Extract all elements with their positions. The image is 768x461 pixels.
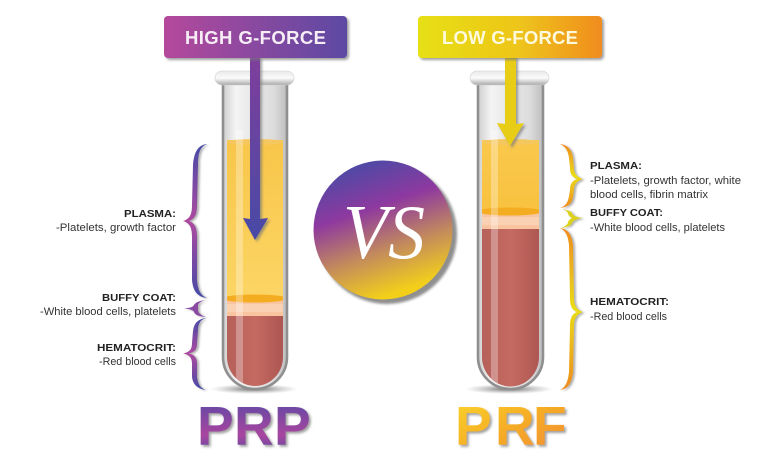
buffy top surface: [227, 294, 283, 302]
buffy coat layer: [482, 213, 539, 229]
left label: buffy coat: [40, 292, 176, 318]
left label: plasma: PLASMA:: [124, 208, 176, 220]
buffy top surface: [482, 208, 539, 216]
right test tube: [465, 71, 553, 394]
glass outline: [223, 84, 287, 389]
glass body: [478, 84, 543, 389]
badge shadow: [317, 164, 457, 304]
badge text: VS: [343, 189, 425, 275]
title: PRP: PRP: [197, 395, 311, 457]
plasma layer: [481, 140, 541, 212]
banner: high g-force: HIGH G-FORCE: [185, 27, 326, 48]
left brace: hematocrit: [183, 318, 206, 390]
right label: buffy coat: BUFFY COAT:: [590, 207, 663, 219]
buffy pale band: [226, 304, 284, 312]
right label: hematocrit: -Red blood cells: [590, 311, 667, 323]
left label: hematocrit: [97, 342, 176, 368]
arrow: low g-force: [497, 56, 524, 146]
tube shadow: [465, 384, 553, 394]
hematocrit layer: [481, 229, 541, 389]
plasma surface: [481, 139, 539, 145]
plasma surface: [226, 139, 284, 145]
glass body: [223, 84, 287, 389]
right label: hematocrit: HEMATOCRIT:: [590, 296, 669, 308]
glass outline: [478, 84, 543, 389]
right label: buffy coat: -White blood cells, platelets: [590, 222, 725, 234]
right label: plasma: blood cells, fibrin matrix: [590, 189, 709, 201]
right brace: buffy coat: [561, 209, 583, 228]
banner: low g-force: [418, 16, 602, 58]
right label: buffy coat: [590, 207, 725, 234]
left label: plasma: [56, 208, 176, 234]
right brace: hematocrit: [560, 228, 583, 390]
tube shadow: [210, 384, 298, 394]
left brace: plasma: [183, 144, 207, 298]
banner: high g-force: [164, 16, 347, 58]
vs badge: [314, 160, 457, 304]
left label: plasma: -Platelets, growth factor: [56, 222, 176, 234]
banner: low g-force: LOW G-FORCE: [442, 27, 578, 48]
right label: hematocrit: [590, 296, 669, 323]
liquid layers: [227, 139, 283, 386]
right label: plasma: [590, 160, 741, 201]
hematocrit layer: [226, 316, 284, 388]
liquid layers: [482, 139, 539, 386]
left label: buffy coat: -White blood cells, platelets: [40, 306, 176, 318]
plasma layer: [226, 140, 284, 300]
buffy coat layer: [227, 300, 283, 316]
left label: buffy coat: BUFFY COAT:: [102, 292, 176, 304]
left brace: buffy coat: [184, 300, 206, 317]
left label: hematocrit: -Red blood cells: [99, 356, 176, 368]
buffy pale band: [481, 217, 541, 225]
glass highlight: [236, 139, 243, 383]
right label: plasma: -Platelets, growth factor, white: [590, 175, 741, 187]
tube lip: [470, 71, 549, 85]
title: PRF: PRF: [455, 395, 567, 457]
arrow: high g-force: [243, 56, 268, 240]
glass highlight: [491, 139, 498, 384]
right brace: plasma: [560, 144, 583, 208]
tube lip: [215, 71, 294, 85]
left label: hematocrit: HEMATOCRIT:: [97, 342, 176, 354]
badge circle: [314, 160, 452, 300]
left test tube: [210, 71, 298, 394]
right label: plasma: PLASMA:: [590, 160, 642, 172]
